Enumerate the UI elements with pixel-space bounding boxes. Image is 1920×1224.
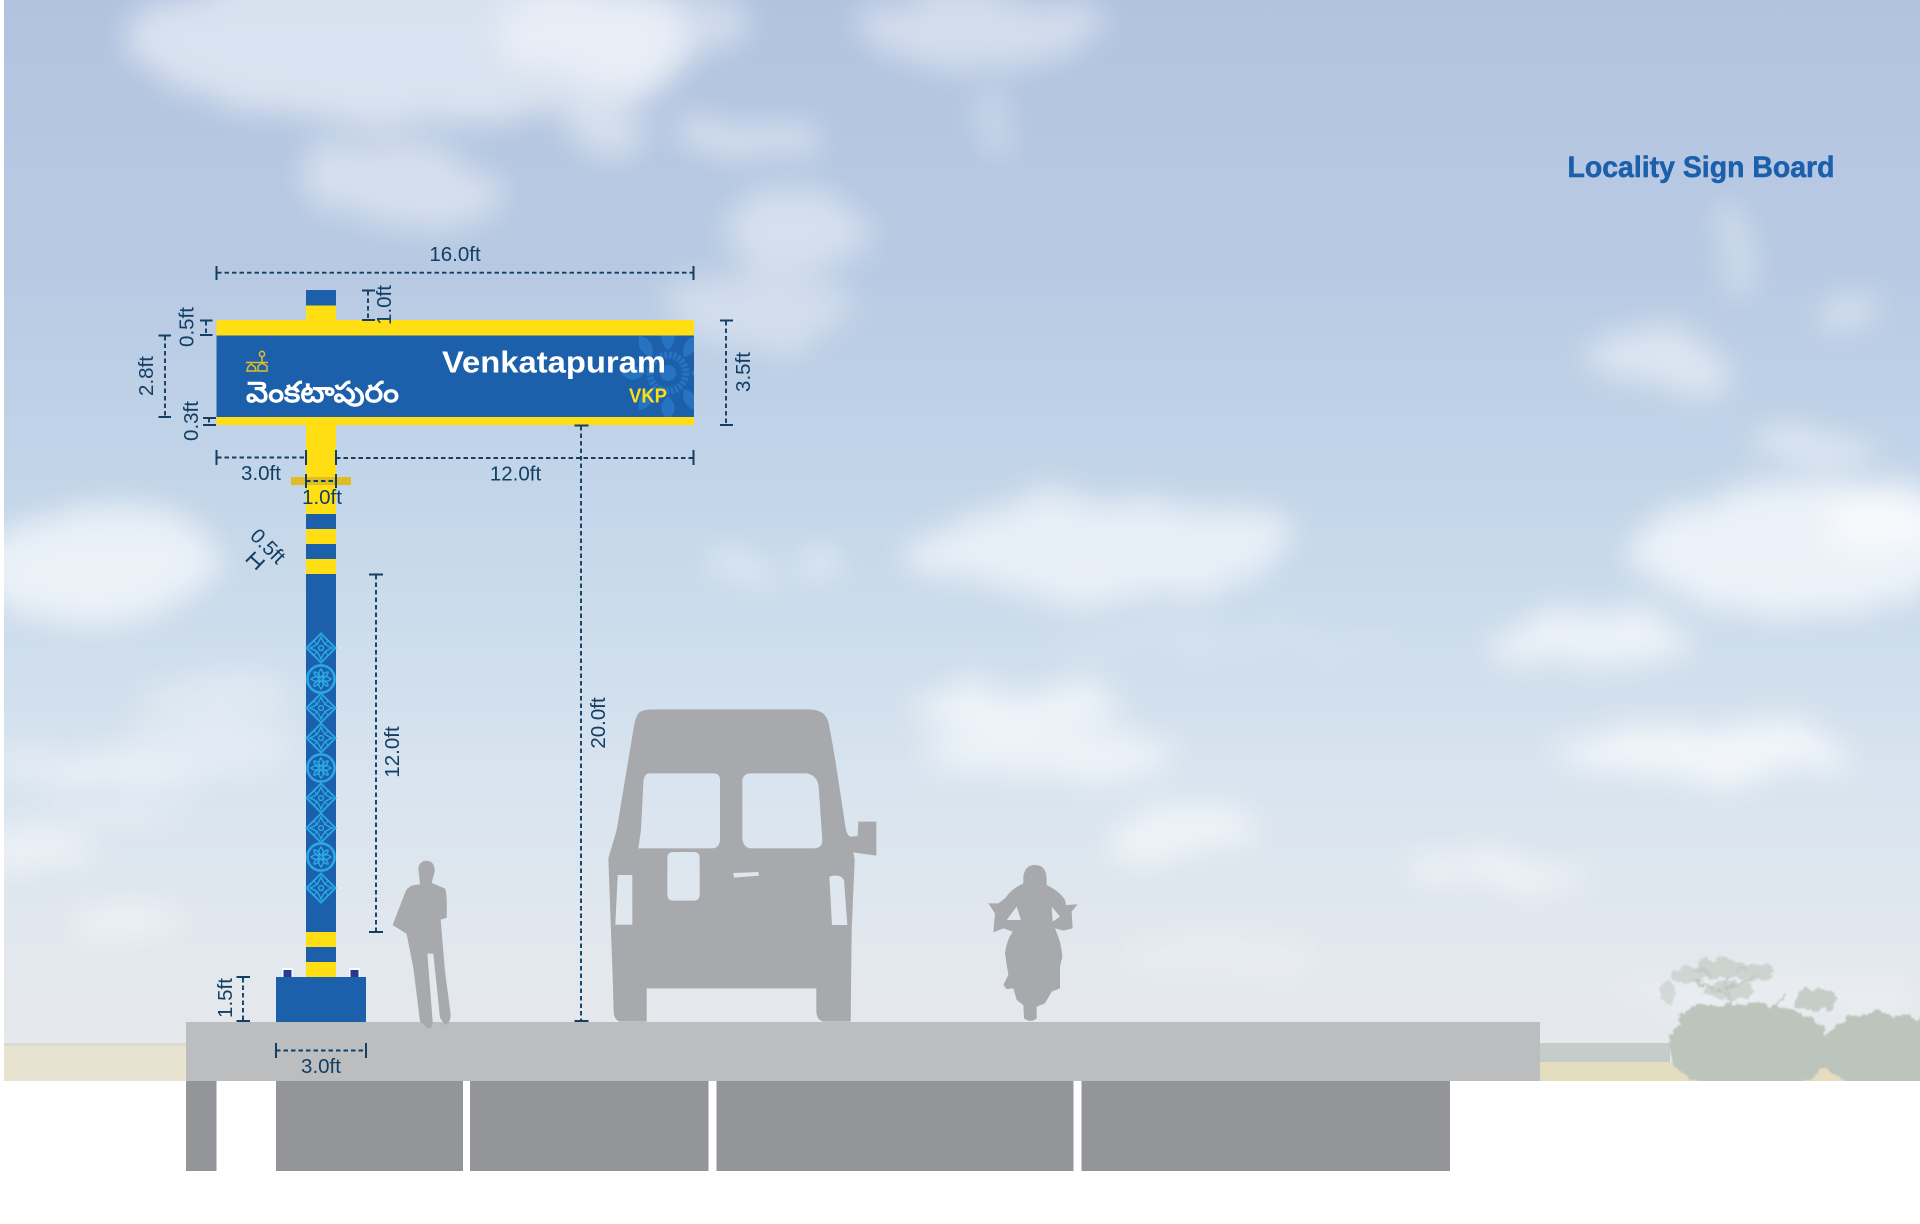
road deck: [186, 1022, 1540, 1081]
dimension: top band 0.5ft: 0.5ft: [176, 307, 198, 347]
dimension: post section 12.0ft: 12.0ft: [381, 726, 404, 778]
sign board: [216, 320, 715, 425]
dimension: left overhang 3.0ft: 3.0ft: [241, 462, 281, 485]
dimension: base width 3.0ft: 3.0ft: [301, 1055, 341, 1078]
title: Locality Sign Board: [1568, 151, 1834, 184]
dimension: panel height 2.8ft: 2.8ft: [135, 356, 158, 396]
landscape: distant field and trees: [4, 959, 1920, 1092]
motorcycle silhouette: [988, 865, 1078, 1021]
dimension: left overhang 3.0ft: [216, 450, 306, 485]
sign mandala decoration: [621, 336, 694, 417]
dimension: right overhang 12.0ft: [336, 450, 694, 486]
dimension: clearance 20.0ft: 20.0ft: [587, 697, 610, 749]
dimension: post width 1.0ft: 1.0ft: [302, 486, 342, 509]
dimension: right overhang 12.0ft: 12.0ft: [490, 462, 541, 486]
dimension: post section 12.0ft: [369, 574, 404, 932]
post ornaments: [306, 634, 336, 902]
dimension: base width 3.0ft: [276, 1043, 366, 1078]
dimension: bottom band 0.3ft: 0.3ft: [180, 401, 203, 441]
post base: [276, 968, 366, 1022]
dimension: base height 1.5ft: [214, 977, 250, 1021]
sign code: VKP: [629, 386, 667, 408]
sign name: Telugu: వెంకటాపురం: [246, 377, 399, 409]
dimension: post width 1.0ft: [302, 474, 342, 509]
dimension: panel height 2.8ft: [135, 336, 171, 417]
dimension: post top 1.0ft: [362, 285, 396, 325]
sign emblem: [246, 351, 268, 371]
person silhouette: [393, 861, 451, 1029]
dimension: band 0.5ft diagonal: 0.5ft: [245, 524, 290, 569]
dimension: base height 1.5ft: 1.5ft: [214, 978, 237, 1018]
sign name: English: Venkatapuram: [442, 344, 666, 380]
dimension: sign height 3.5ft: [720, 320, 755, 425]
dimension: bottom band 0.3ft: [180, 401, 216, 441]
dimension: sign width 16.0ft: 16.0ft: [429, 243, 481, 266]
dimension: sign height 3.5ft: 3.5ft: [732, 352, 755, 392]
dimension: sign width 16.0ft: [216, 243, 694, 280]
dimension: top band 0.5ft: [176, 307, 212, 347]
foundation blocks below road: [186, 1081, 1450, 1171]
dimension: clearance 20.0ft: [574, 426, 610, 1021]
post collar band: [291, 477, 351, 485]
sign post: [306, 290, 336, 977]
van silhouette: [608, 709, 876, 1022]
dimension: post top 1.0ft: 1.0ft: [373, 285, 396, 325]
